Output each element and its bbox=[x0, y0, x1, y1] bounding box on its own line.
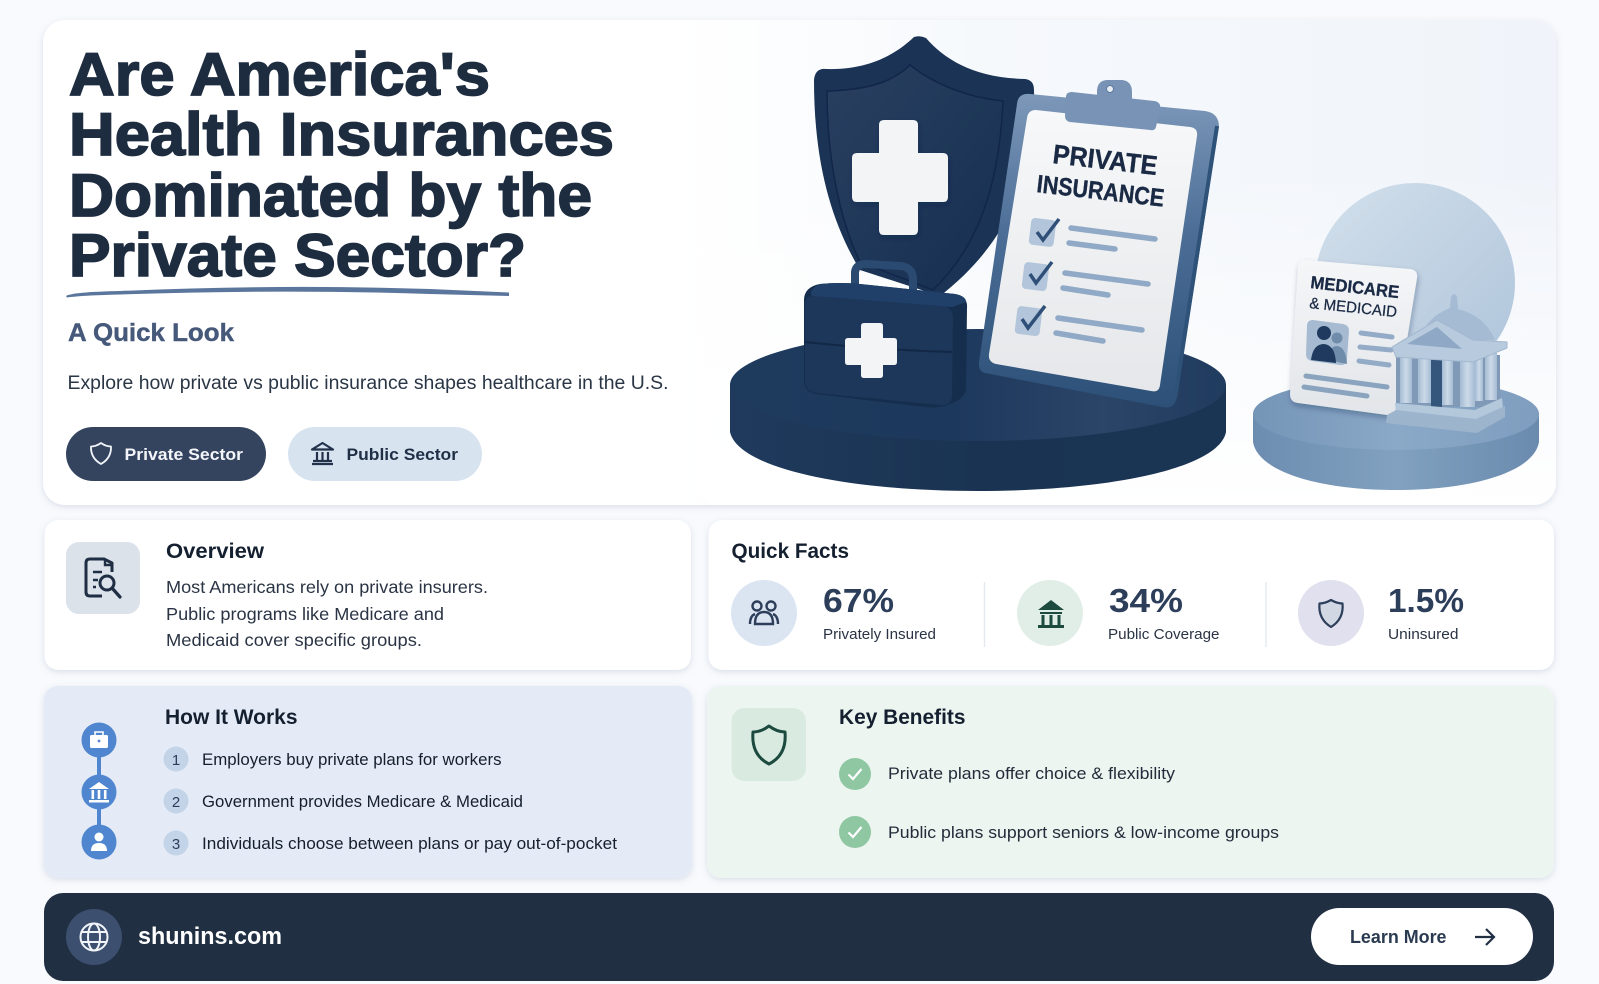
label: public sector: Public Sector bbox=[346, 445, 458, 464]
icon: bank bbox=[1038, 600, 1064, 628]
heading: how it works: How It Works bbox=[165, 706, 298, 729]
step 2: 2 bbox=[172, 794, 180, 811]
overview text bbox=[166, 577, 488, 650]
columns bbox=[1396, 353, 1500, 407]
medical case bbox=[804, 264, 967, 408]
icon: shield bbox=[91, 443, 111, 464]
step 2: Government provides Medicare & Medicaid bbox=[202, 793, 523, 811]
backdrop circle bbox=[1315, 183, 1515, 383]
clipboard heading bbox=[1035, 139, 1166, 213]
stat: public coverage bbox=[1017, 580, 1220, 646]
pediment bbox=[1392, 320, 1507, 362]
check row 2 bbox=[1021, 262, 1148, 295]
step 2 bbox=[164, 788, 523, 814]
shield cross bbox=[852, 120, 948, 235]
overview text: Medicaid cover specific groups. bbox=[166, 630, 422, 650]
step 3: 3 bbox=[172, 836, 180, 853]
button: public sector bbox=[288, 427, 482, 481]
title: Private Sector? bbox=[69, 222, 526, 289]
step 1: Employers buy private plans for workers bbox=[202, 751, 502, 769]
step icon: bank bbox=[82, 774, 116, 810]
building bbox=[1386, 294, 1507, 433]
icon: shield bbox=[732, 708, 806, 781]
panel: hero bbox=[43, 20, 1556, 505]
label: privately insured: Privately Insured bbox=[823, 626, 936, 643]
heading: key benefits: Key Benefits bbox=[839, 706, 966, 729]
value: 34%: 34% bbox=[1109, 582, 1183, 619]
card heading: MEDICARE bbox=[1310, 272, 1400, 302]
value: 67%: 67% bbox=[823, 582, 894, 619]
button: learn more: Learn More bbox=[1350, 927, 1446, 947]
benefit 2 bbox=[839, 816, 1279, 848]
label: uninsured: Uninsured bbox=[1388, 626, 1458, 643]
blue podium bbox=[1253, 378, 1539, 490]
clipboard bbox=[979, 80, 1219, 408]
benefit 2: Public plans support seniors & low-income groups bbox=[888, 823, 1279, 842]
check row 3 bbox=[1014, 306, 1142, 341]
label: private sector: Private Sector bbox=[124, 445, 243, 464]
intro text: Explore how private vs public insurance shapes healthcare in the U.S. bbox=[68, 373, 668, 394]
heading: overview: Overview bbox=[166, 540, 265, 563]
label: public coverage: Public Coverage bbox=[1108, 626, 1220, 643]
clipboard heading: INSURANCE bbox=[1035, 170, 1166, 213]
footer bar bbox=[44, 893, 1554, 981]
medicare card bbox=[1290, 260, 1417, 415]
title underline bbox=[66, 287, 509, 298]
step 3 bbox=[164, 830, 617, 856]
title: Dominated by the bbox=[69, 162, 592, 229]
benefit 1 bbox=[839, 758, 1176, 790]
clipboard heading: PRIVATE bbox=[1051, 139, 1159, 181]
card photo bbox=[1306, 320, 1349, 365]
panel: how it works bbox=[44, 686, 692, 878]
shield bbox=[814, 36, 1034, 296]
clipboard clip bbox=[1065, 80, 1160, 130]
step 1 bbox=[164, 746, 502, 772]
case cross bbox=[845, 323, 897, 378]
step icon: person bbox=[82, 824, 116, 860]
subtitle: A Quick Look bbox=[68, 319, 234, 347]
check row 1 bbox=[1028, 218, 1155, 249]
icon: people bbox=[750, 602, 778, 624]
heading: quick facts: Quick Facts bbox=[732, 540, 849, 563]
button: private sector bbox=[66, 427, 266, 481]
illustration: large podium with shield, clipboard and case bbox=[730, 36, 1226, 491]
stat: privately insured bbox=[731, 580, 936, 646]
dome bbox=[1420, 294, 1495, 340]
panel: quick facts bbox=[708, 520, 1554, 670]
panel: key benefits bbox=[707, 686, 1554, 878]
title bbox=[69, 41, 614, 289]
step 1: 1 bbox=[172, 752, 180, 769]
icon: arrow bbox=[1475, 929, 1494, 945]
steps bbox=[1395, 398, 1503, 421]
card lines bbox=[1304, 333, 1392, 396]
value: 1.5%: 1.5% bbox=[1388, 582, 1464, 619]
benefit 1: Private plans offer choice & flexibility bbox=[888, 764, 1176, 783]
icon: bank bbox=[312, 443, 333, 464]
step 3: Individuals choose between plans or pay out-of-pocket bbox=[202, 835, 617, 853]
timeline bbox=[82, 722, 116, 860]
panel: overview bbox=[44, 520, 691, 670]
icon: globe bbox=[66, 909, 122, 965]
overview text: Most Americans rely on private insurers. bbox=[166, 577, 488, 597]
website: shunins.com bbox=[138, 923, 282, 950]
title: Health Insurances bbox=[69, 101, 614, 168]
navy podium bbox=[730, 329, 1226, 491]
overview text: Public programs like Medicare and bbox=[166, 604, 444, 624]
step icon: briefcase bbox=[82, 722, 116, 758]
button: learn more bbox=[1311, 908, 1533, 965]
card heading bbox=[1309, 272, 1400, 321]
card heading: & MEDICAID bbox=[1309, 295, 1398, 321]
illustration: small podium with circle, card and building bbox=[1253, 183, 1539, 490]
icon: document search bbox=[66, 542, 140, 614]
title: Are America's bbox=[69, 41, 490, 108]
stat: uninsured bbox=[1298, 580, 1464, 646]
icon: shield bbox=[1319, 600, 1343, 627]
